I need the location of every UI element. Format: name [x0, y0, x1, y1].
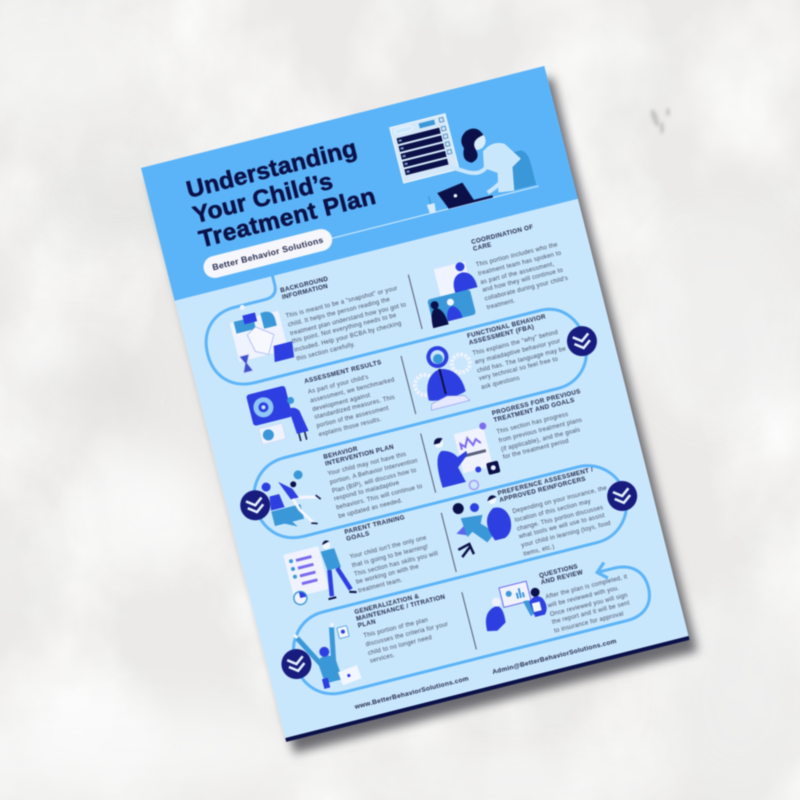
flyer page: treatment team has spoken to — [478, 250, 562, 277]
flyer page: that is going to be learning! — [351, 544, 429, 569]
artwork layer: flow path, dividers, badges, illustrations — [204, 112, 652, 696]
icon: progress chart with man — [429, 421, 503, 497]
flyer page: change. This portion discusses — [516, 505, 604, 532]
flyer page: as part of the assessment, — [480, 261, 555, 286]
flyer page: services. — [370, 653, 396, 665]
flyer page: Depending on your insurance, the — [512, 486, 608, 515]
section: parent training goals — [344, 514, 439, 595]
flyer page: ASSESSMENT (FBA) — [468, 324, 535, 347]
subtitle pill — [201, 227, 335, 280]
icon: person with gears — [407, 341, 479, 413]
section: questions and review — [538, 563, 631, 635]
section: functional behavior assessment — [466, 313, 567, 391]
badge: chevrons left — [237, 487, 273, 524]
badge: chevrons left 2 — [278, 646, 315, 682]
flyer page: CARE — [472, 242, 493, 253]
column dividers — [382, 275, 502, 650]
arrowhead at end of path — [595, 562, 608, 580]
flyer page: discusses the criteria for your — [365, 621, 449, 648]
icon: coordination video call — [419, 259, 485, 328]
flyer page: This portion of the plan — [363, 617, 429, 640]
flyer page: development against — [312, 392, 371, 413]
flyer page: (if applicable), and the goals — [500, 427, 581, 453]
flyer page: standardized measures. This — [314, 395, 396, 421]
bottom navy bar — [285, 636, 690, 742]
flyer page: location of this section may — [514, 499, 592, 524]
icon: man with arrows preference — [447, 491, 517, 558]
icon: woman leaping with shapes — [260, 467, 326, 535]
icon: two people reviewing chart — [478, 578, 549, 633]
flyer page: behaviors. This will continue to — [336, 484, 423, 512]
flyer page: INFORMATION — [281, 283, 329, 301]
flyer page: TREATMENT AND GOALS — [493, 397, 575, 424]
icon: background information figure — [226, 295, 297, 373]
flyer page: be working on with the — [356, 564, 420, 586]
flyer page: included. Help your BCBA by checking — [294, 321, 402, 354]
badge: chevrons right 1 — [564, 323, 600, 359]
flyer page: GENERALIZATION & — [354, 593, 420, 616]
flyer page: explains those results. — [318, 417, 382, 438]
flyer page: After the plan is completed, it — [545, 574, 628, 601]
flyer page: AND REVIEW — [540, 569, 584, 587]
flyer page: PLAN — [357, 619, 377, 630]
title — [184, 135, 379, 253]
flyer page: portion of the assessment — [316, 406, 390, 430]
flyer page: Your child may not have this — [327, 452, 407, 477]
flyer page: treatment. — [486, 298, 516, 311]
flyer page: Once reviewed you will sign — [549, 592, 628, 618]
footer email: Admin@BetterBehaviorSolutions.com — [492, 638, 617, 676]
flyer page: will be reviewed with you. — [547, 585, 620, 609]
footer website: www.BetterBehaviorSolutions.com — [354, 675, 470, 711]
flyer page: BEHAVIOR — [323, 446, 359, 461]
flyer page: from previous treatment plans — [498, 417, 583, 444]
flyer page: what tools we will use to assist — [519, 513, 606, 541]
flyer page: This section has progress — [496, 412, 569, 436]
flyer page: very technical so feel free to — [479, 357, 559, 383]
flyer page: respond to maladaptive — [334, 481, 400, 503]
flyer page: any maladaptive behavior your — [474, 338, 561, 366]
flyer page: this point. Not everything needs to be — [292, 313, 397, 345]
flyer page: QUESTIONS — [538, 563, 579, 580]
subtitle pill: Better Behavior Solutions — [211, 235, 324, 272]
flyer page: ASSESSMENT RESULTS — [304, 359, 382, 385]
flyer page: to insurance for approval — [554, 611, 625, 635]
flyer page: and how they will continue to — [482, 268, 564, 294]
flyer page: the report and it will be sent — [552, 601, 631, 626]
section: generalization and maintenance — [354, 593, 449, 665]
flyer page — [141, 66, 690, 742]
section: progress for previous treatment and goals — [491, 388, 583, 461]
flyer page: FUNCTIONAL BEHAVIOR — [466, 313, 547, 340]
flyer page: PREFERENCE ASSESSMENT / — [497, 466, 594, 497]
flyer page: APPROVED REINFORCERS — [499, 476, 587, 504]
flyer page: This section has skills you will — [354, 551, 439, 578]
flyer page: BACKGROUND — [280, 276, 329, 294]
section: behavior intervention plan — [322, 444, 423, 520]
flyer page: items, etc.) — [523, 544, 555, 558]
section: background information — [280, 276, 407, 363]
flyer page: COORDINATION OF — [471, 224, 534, 246]
icon: parent with clipboard — [282, 536, 357, 607]
flyer page: assessment, we benchmarked — [310, 377, 395, 404]
badge: chevrons right 2 — [604, 478, 640, 514]
flyer page: This explains the "why" behind — [472, 330, 559, 357]
flyer page: for the treatment period — [503, 439, 570, 461]
flyer page: your child in learning (toys, food — [521, 521, 612, 549]
icon: assessment results presenter — [246, 382, 311, 451]
flyer page: Plan (BIP), will discuss how to — [331, 467, 417, 494]
header rule line — [332, 186, 539, 238]
flyer page: As part of your child's — [308, 375, 369, 396]
flyer page: portion. A Behavior Intervention — [329, 458, 418, 486]
flyer page: MAINTENANCE / TITRATION — [356, 594, 446, 623]
title: Your Child’s — [190, 167, 336, 229]
title: Treatment Plan — [196, 183, 379, 253]
header band — [141, 66, 578, 301]
flyer page: treatment plan understand how you got to — [290, 302, 407, 337]
icon: celebrating person with laptop — [294, 619, 362, 694]
title: Understanding — [184, 135, 360, 204]
section: preference assessment — [496, 466, 612, 558]
flyer page: child has. The language may be — [476, 346, 567, 374]
flyer page: ask questions — [481, 376, 521, 391]
section: assessment results — [304, 359, 396, 438]
winding flow path — [190, 193, 655, 704]
flyer page: This is meant to be a "snapshot" or your — [285, 286, 398, 320]
flyer page: child. It helps the person reading the — [287, 297, 391, 328]
flyer page: INTERVENTION PLAN — [325, 444, 395, 468]
flyer page: child to no longer need — [367, 635, 433, 657]
flyer page: GOALS — [346, 530, 370, 543]
flyer page: collaborate during your child's — [484, 276, 569, 303]
flyer page: Your child isn't the only one — [349, 535, 427, 561]
flyer page: PARENT TRAINING — [344, 514, 406, 536]
icon: checklist panel and woman at laptop — [390, 96, 537, 218]
flyer page: this section carefully. — [296, 342, 356, 363]
flyer page: PROGRESS FOR PREVIOUS — [491, 388, 581, 417]
flyer page: treatment team. — [358, 578, 403, 595]
flyer page: This portion includes who the — [475, 242, 558, 269]
section: coordination of care — [470, 224, 569, 311]
flyer page: be updated as needed. — [338, 498, 403, 520]
